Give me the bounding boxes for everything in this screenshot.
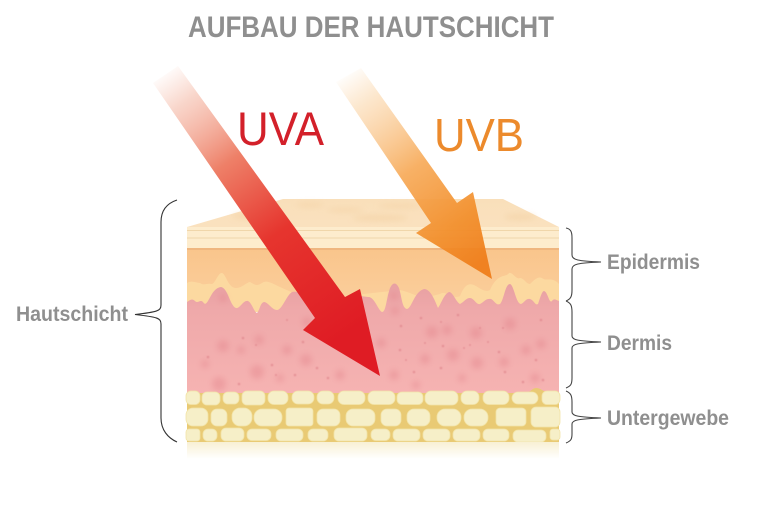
subcutaneous fat layer — [186, 388, 560, 442]
brace: Dermis — [566, 301, 601, 388]
label: Untergewebe: Untergewebe — [607, 407, 729, 430]
arrow: UVA — [153, 66, 380, 376]
label: UVB: UVB — [434, 109, 524, 161]
title: AUFBAU DER HAUTSCHICHT — [188, 11, 554, 44]
skin surface top — [187, 199, 559, 250]
brace: Epidermis — [566, 228, 601, 301]
label: Dermis: Dermis — [607, 332, 672, 355]
dermis layer — [187, 284, 559, 395]
label: Hautschicht: Hautschicht — [16, 303, 128, 326]
arrow: UVB — [336, 68, 492, 279]
label: Epidermis: Epidermis — [607, 251, 700, 274]
epidermis light wavy band — [187, 273, 559, 312]
brace: Hautschicht — [135, 200, 177, 442]
brace: Untergewebe — [566, 391, 601, 443]
bottom fade — [187, 442, 559, 459]
label: UVA: UVA — [237, 102, 325, 155]
epidermis layer — [187, 250, 559, 310]
skin cross-section — [186, 199, 560, 459]
dermis blood vessels — [201, 292, 546, 391]
